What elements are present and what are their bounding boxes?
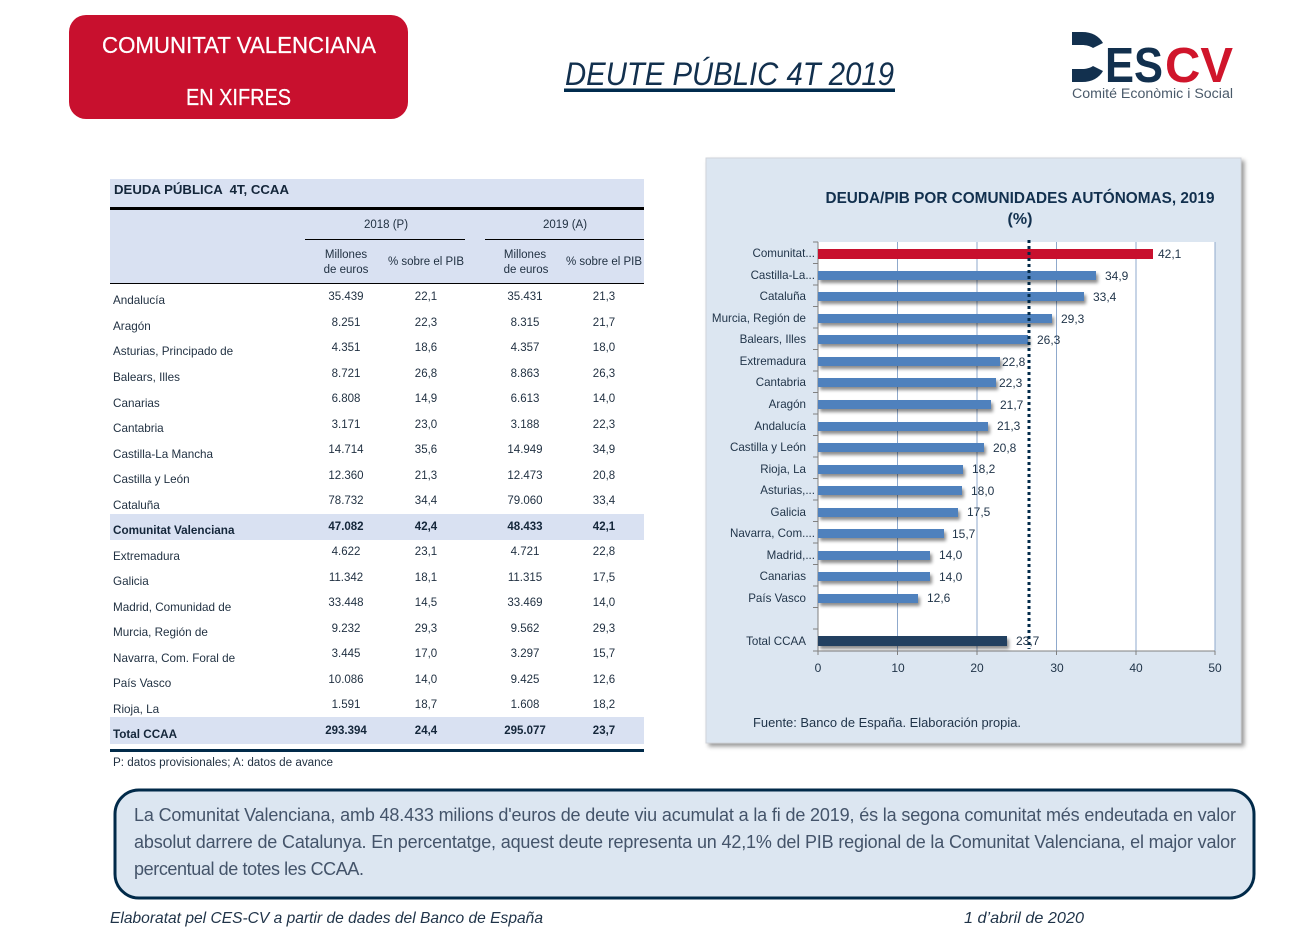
- callout: summary text: absolut darrere de Catalunya. En percentatge, aquest deute representa un 42,1% del PIB regional de la Comunitat Valenciana, el major valor: [134, 832, 1236, 852]
- table rows: 26,3: [593, 368, 615, 380]
- table rows: 15,7: [593, 648, 615, 660]
- logo: CES-CV: CV: [1165, 39, 1233, 93]
- data labels: 17,5: [967, 505, 991, 519]
- callout: summary text: La Comunitat Valenciana, amb 48.433 milions d'euros de deute viu acumulat a la fi de 2019, és la segona comunitat més endeutada en valor: [134, 805, 1236, 825]
- table rows: Aragón: [113, 320, 151, 333]
- table column headers: [324, 219, 642, 276]
- table rows: 8.315: [511, 317, 539, 329]
- header badge: Comunitat Valenciana en xifres: COMUNITAT VALENCIANA: [102, 32, 377, 58]
- table rows: [113, 291, 616, 741]
- x axis labels: 40: [1129, 661, 1143, 675]
- table rows: 47.082: [328, 521, 364, 533]
- data labels: 26,3: [1037, 333, 1061, 347]
- table rows: 29,3: [415, 623, 437, 635]
- table rows: 21,3: [415, 470, 437, 482]
- chart title: [826, 188, 1215, 228]
- table rows: 14.714: [328, 444, 364, 456]
- data labels: 18,2: [972, 462, 996, 476]
- table heading: DEUDA PÚBLICA 4T, CCAA: [114, 182, 290, 197]
- category labels: Cataluña: [760, 290, 807, 303]
- table rows: País Vasco: [113, 677, 172, 690]
- chart title: (%): [1008, 211, 1032, 228]
- table rows: 21,3: [593, 291, 615, 303]
- x axis labels: 50: [1208, 661, 1222, 675]
- x axis labels: [815, 661, 1222, 675]
- header badge: Comunitat Valenciana en xifres: EN XIFRES: [186, 84, 291, 110]
- x axis labels: 0: [815, 661, 822, 675]
- category labels: Galicia: [771, 506, 807, 519]
- category labels: País Vasco: [748, 592, 806, 605]
- category labels: Andalucía: [754, 420, 807, 433]
- category labels: Cantabria: [756, 376, 807, 389]
- x axis labels: 20: [970, 661, 984, 675]
- data labels: 18,0: [971, 484, 995, 498]
- panel: debt table: [110, 179, 644, 752]
- table rows: 1.591: [332, 699, 360, 711]
- table rows: 29,3: [593, 623, 615, 635]
- table rows: 3.297: [511, 648, 539, 660]
- table rows: 42,4: [415, 521, 438, 533]
- logo: CES-CV: Comité Econòmic i Social: [1072, 86, 1233, 101]
- table rows: Cataluña: [113, 499, 160, 512]
- table rows: 14,0: [593, 597, 615, 609]
- category labels: Balears, Illes: [740, 333, 806, 346]
- table column headers: 2018 (P): [364, 219, 408, 231]
- table rows: Total CCAA: [113, 728, 178, 741]
- footer: source: Elaboratat pel CES-CV a partir de dades del Banco de España: [110, 910, 543, 927]
- bars: [818, 249, 1153, 646]
- data labels: 21,3: [997, 419, 1021, 433]
- table rows: 18,0: [593, 342, 615, 354]
- table rows: 9.232: [332, 623, 360, 635]
- category labels: [712, 247, 815, 648]
- data labels: 15,7: [952, 527, 976, 541]
- table rows: 22,8: [593, 546, 615, 558]
- table rows: Castilla y León: [113, 473, 190, 486]
- table footnote: P: datos provisionales; A: datos de avance: [113, 757, 333, 769]
- category labels: Asturias,...: [760, 484, 815, 497]
- category labels: Navarra, Com....: [730, 527, 815, 540]
- category labels: Madrid,...: [767, 549, 815, 562]
- data labels: 42,1: [1158, 247, 1182, 261]
- table rows: 34,9: [593, 444, 615, 456]
- table rows: 11.315: [508, 572, 542, 584]
- table rows: Canarias: [113, 397, 160, 410]
- data labels: 14,0: [939, 570, 963, 584]
- data labels: 33,4: [1093, 290, 1117, 304]
- footer: date: 1 d’abril de 2020: [964, 910, 1084, 927]
- table rows: 18,7: [415, 699, 437, 711]
- table rows: Madrid, Comunidad de: [113, 601, 231, 614]
- table rows: 18,6: [415, 342, 437, 354]
- table rows: 12.473: [507, 470, 543, 482]
- table rows: 14,5: [415, 597, 437, 609]
- x axis labels: 30: [1050, 661, 1064, 675]
- table rows: 33,4: [593, 495, 616, 507]
- table rows: Balears, Illes: [113, 371, 180, 384]
- table rows: Galicia: [113, 575, 149, 588]
- data labels: 14,0: [939, 548, 963, 562]
- table rows: 8.863: [511, 368, 539, 380]
- table rows: 1.608: [511, 699, 539, 711]
- table rows: 22,3: [593, 419, 615, 431]
- table rows: 9.562: [511, 623, 539, 635]
- table rows: 6.613: [511, 393, 539, 405]
- table rows: 14.949: [507, 444, 543, 456]
- table rows: 9.425: [511, 674, 539, 686]
- table rows: Andalucía: [113, 294, 165, 307]
- table column headers: 2019 (A): [543, 219, 587, 231]
- callout: summary text: [115, 790, 1254, 898]
- table rows: 22,1: [415, 291, 437, 303]
- table rows: 18,1: [415, 572, 437, 584]
- table column headers: de euros: [504, 264, 549, 276]
- table rows: 18,2: [593, 699, 615, 711]
- category labels: Extremadura: [740, 355, 807, 368]
- table rows: 14,0: [415, 674, 437, 686]
- data labels: 22,8: [1002, 355, 1026, 369]
- data labels: 29,3: [1061, 312, 1085, 326]
- table rows: Asturias, Principado de: [113, 345, 233, 358]
- table rows: Navarra, Com. Foral de: [113, 652, 235, 665]
- table rows: Cantabria: [113, 422, 164, 435]
- table column headers: Millones: [325, 249, 367, 261]
- table rows: 4.721: [511, 546, 539, 558]
- table rows: 3.445: [332, 648, 360, 660]
- category labels: Murcia, Región de: [712, 312, 806, 325]
- table rows: Castilla-La Mancha: [113, 448, 214, 461]
- x axis labels: 10: [891, 661, 905, 675]
- table rows: 26,8: [415, 368, 437, 380]
- table rows: 4.622: [332, 546, 360, 558]
- category labels: Castilla-La...: [751, 269, 815, 282]
- plot area and axes: [813, 242, 1215, 655]
- table rows: 23,1: [415, 546, 437, 558]
- logo: CES-CV: ES: [1105, 39, 1163, 93]
- table rows: 10.086: [328, 674, 364, 686]
- table rows: 11.342: [329, 572, 363, 584]
- table rows: 12.360: [328, 470, 364, 482]
- table rows: 3.171: [332, 419, 360, 431]
- table rows: 22,3: [415, 317, 437, 329]
- table rows: 295.077: [504, 725, 546, 737]
- table rows: 4.357: [511, 342, 539, 354]
- main title: DEUTE PÚBLIC 4T 2019: [565, 56, 894, 92]
- category labels: Castilla y León: [730, 441, 806, 454]
- table rows: Extremadura: [113, 550, 180, 563]
- table rows: 20,8: [593, 470, 615, 482]
- panel: debt/GDP bar chart: [706, 158, 1241, 743]
- category labels: Rioja, La: [760, 463, 807, 476]
- table rows: 14,0: [593, 393, 615, 405]
- table rows: 33.469: [507, 597, 543, 609]
- chart title: DEUDA/PIB POR COMUNIDADES AUTÓNOMAS, 2019: [826, 188, 1215, 207]
- data labels: 21,7: [1000, 398, 1024, 412]
- table rows: 42,1: [593, 521, 616, 533]
- table rows: 8.721: [332, 368, 360, 380]
- table rows: 14,9: [415, 393, 437, 405]
- data labels: [927, 247, 1182, 648]
- table rows: 33.448: [328, 597, 364, 609]
- table rows: 293.394: [325, 725, 367, 737]
- data labels: 20,8: [993, 441, 1017, 455]
- chart source: Fuente: Banco de España. Elaboración propia.: [753, 715, 1021, 730]
- table rows: 79.060: [507, 495, 543, 507]
- table rows: 3.188: [511, 419, 539, 431]
- category labels: Aragón: [769, 398, 806, 411]
- category labels: Total CCAA: [746, 635, 806, 648]
- table rows: 35.439: [328, 291, 364, 303]
- table rows: 34,4: [415, 495, 438, 507]
- table rows: 78.732: [328, 495, 364, 507]
- callout: summary text: percentual de totes les CCAA.: [134, 859, 364, 879]
- table rows: 4.351: [332, 342, 360, 354]
- table rows: 17,5: [593, 572, 615, 584]
- table rows: Murcia, Región de: [113, 626, 208, 639]
- data labels: 34,9: [1105, 269, 1129, 283]
- table rows: 35,6: [415, 444, 437, 456]
- table rows: 12,6: [593, 674, 615, 686]
- dotted average line: [1028, 240, 1030, 649]
- table rows: 21,7: [593, 317, 615, 329]
- table rows: 35.431: [507, 291, 543, 303]
- table rows: Comunitat Valenciana: [113, 524, 235, 537]
- table rows: 24,4: [415, 725, 438, 737]
- data labels: 23,7: [1016, 634, 1040, 648]
- header badge: Comunitat Valenciana en xifres: [69, 15, 408, 119]
- table rows: 17,0: [415, 648, 437, 660]
- category labels: Comunitat...: [752, 247, 815, 260]
- table rows: 8.251: [332, 317, 360, 329]
- table column headers: de euros: [324, 264, 369, 276]
- table rows: Rioja, La: [113, 703, 160, 716]
- logo: CES-CV: [1072, 32, 1233, 101]
- table rows: 23,0: [415, 419, 437, 431]
- table rows: 6.808: [332, 393, 360, 405]
- table rows: 48.433: [507, 521, 543, 533]
- table column headers: % sobre el PIB: [388, 256, 464, 268]
- data labels: 12,6: [927, 591, 951, 605]
- table column headers: Millones: [504, 249, 546, 261]
- category labels: Canarias: [760, 570, 806, 583]
- table rows: 23,7: [593, 725, 615, 737]
- table column headers: % sobre el PIB: [566, 256, 642, 268]
- data labels: 22,3: [999, 376, 1023, 390]
